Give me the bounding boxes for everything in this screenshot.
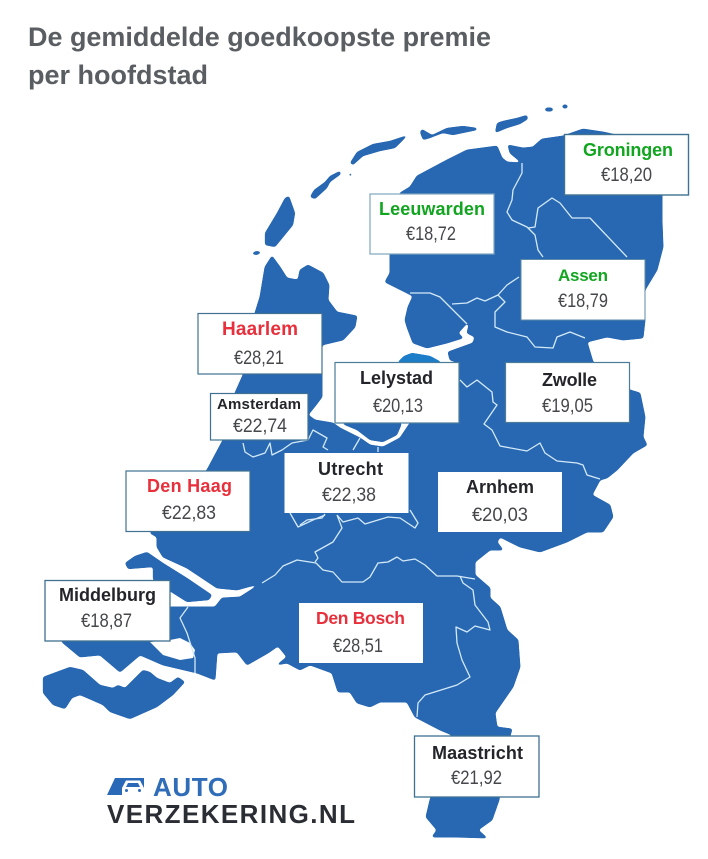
label: Den Haag: [126, 471, 250, 532]
label: Groningen: [564, 134, 688, 195]
label: Amsterdam: Amsterdam: [217, 396, 301, 413]
label: Den Bosch: €28,51: [333, 636, 383, 657]
label: Leeuwarden: [370, 194, 494, 254]
title: De gemiddelde goedkoopste premie: [28, 22, 491, 52]
map land areas: [43, 104, 663, 838]
label: Maastricht: Maastricht: [432, 743, 523, 763]
label: Middelburg: [45, 580, 170, 641]
Wadden islands: [251, 104, 568, 255]
label: Haarlem: Haarlem: [222, 319, 298, 340]
label: Utrecht: [284, 453, 408, 513]
label: Maastricht: [414, 736, 539, 797]
provincial borders: [180, 163, 627, 717]
label: Haarlem: [198, 314, 322, 374]
Flevoland: [340, 353, 443, 442]
logo: autoverzekering.nl: VERZEKERING.NL: [107, 799, 355, 829]
label: Arnhem: €20,03: [472, 505, 528, 526]
label: Lelystad: Lelystad: [360, 368, 433, 388]
label: Assen: Assen: [558, 266, 608, 285]
label: Amsterdam: [210, 394, 308, 440]
label: Groningen: €18,20: [601, 165, 652, 186]
icon: car: [107, 778, 147, 797]
label: Zwolle: [506, 362, 630, 422]
label: Den Bosch: [299, 603, 423, 663]
title: per hoofdstad: [28, 60, 208, 90]
label: Lelystad: €20,13: [373, 396, 423, 417]
label: Zwolle: €19,05: [542, 396, 593, 417]
label: Maastricht: €21,92: [451, 768, 502, 789]
label: Leeuwarden: Leeuwarden: [379, 199, 485, 219]
label: Middelburg: Middelburg: [59, 585, 156, 605]
label: Haarlem: €28,21: [234, 348, 284, 369]
Goeree-Overflakkee: [125, 552, 212, 602]
label: Zwolle: Zwolle: [542, 370, 597, 390]
title: [28, 22, 491, 90]
label: Amsterdam: €22,74: [233, 416, 287, 437]
label: Den Haag: €22,83: [162, 503, 216, 524]
label: Utrecht: €22,38: [322, 485, 376, 506]
label: Lelystad: [335, 362, 459, 423]
white inland lake: [150, 638, 195, 660]
label: Assen: €18,79: [558, 291, 608, 312]
label: Arnhem: [438, 472, 562, 532]
logo: autoverzekering.nl: [107, 772, 355, 829]
Zeeuws-Vlaanderen: [43, 667, 185, 719]
label: Den Haag: Den Haag: [147, 476, 232, 496]
label: Leeuwarden: €18,72: [406, 224, 456, 245]
label: Assen: [521, 260, 645, 320]
label: Arnhem: Arnhem: [466, 477, 534, 497]
label: Groningen: Groningen: [583, 140, 673, 160]
mainland: [62, 129, 663, 838]
label: Den Bosch: Den Bosch: [316, 608, 405, 628]
label: Middelburg: €18,87: [81, 611, 132, 632]
label: Utrecht: Utrecht: [318, 459, 383, 479]
logo: autoverzekering.nl: AUTO: [153, 772, 228, 802]
map of the Netherlands: [43, 104, 663, 838]
